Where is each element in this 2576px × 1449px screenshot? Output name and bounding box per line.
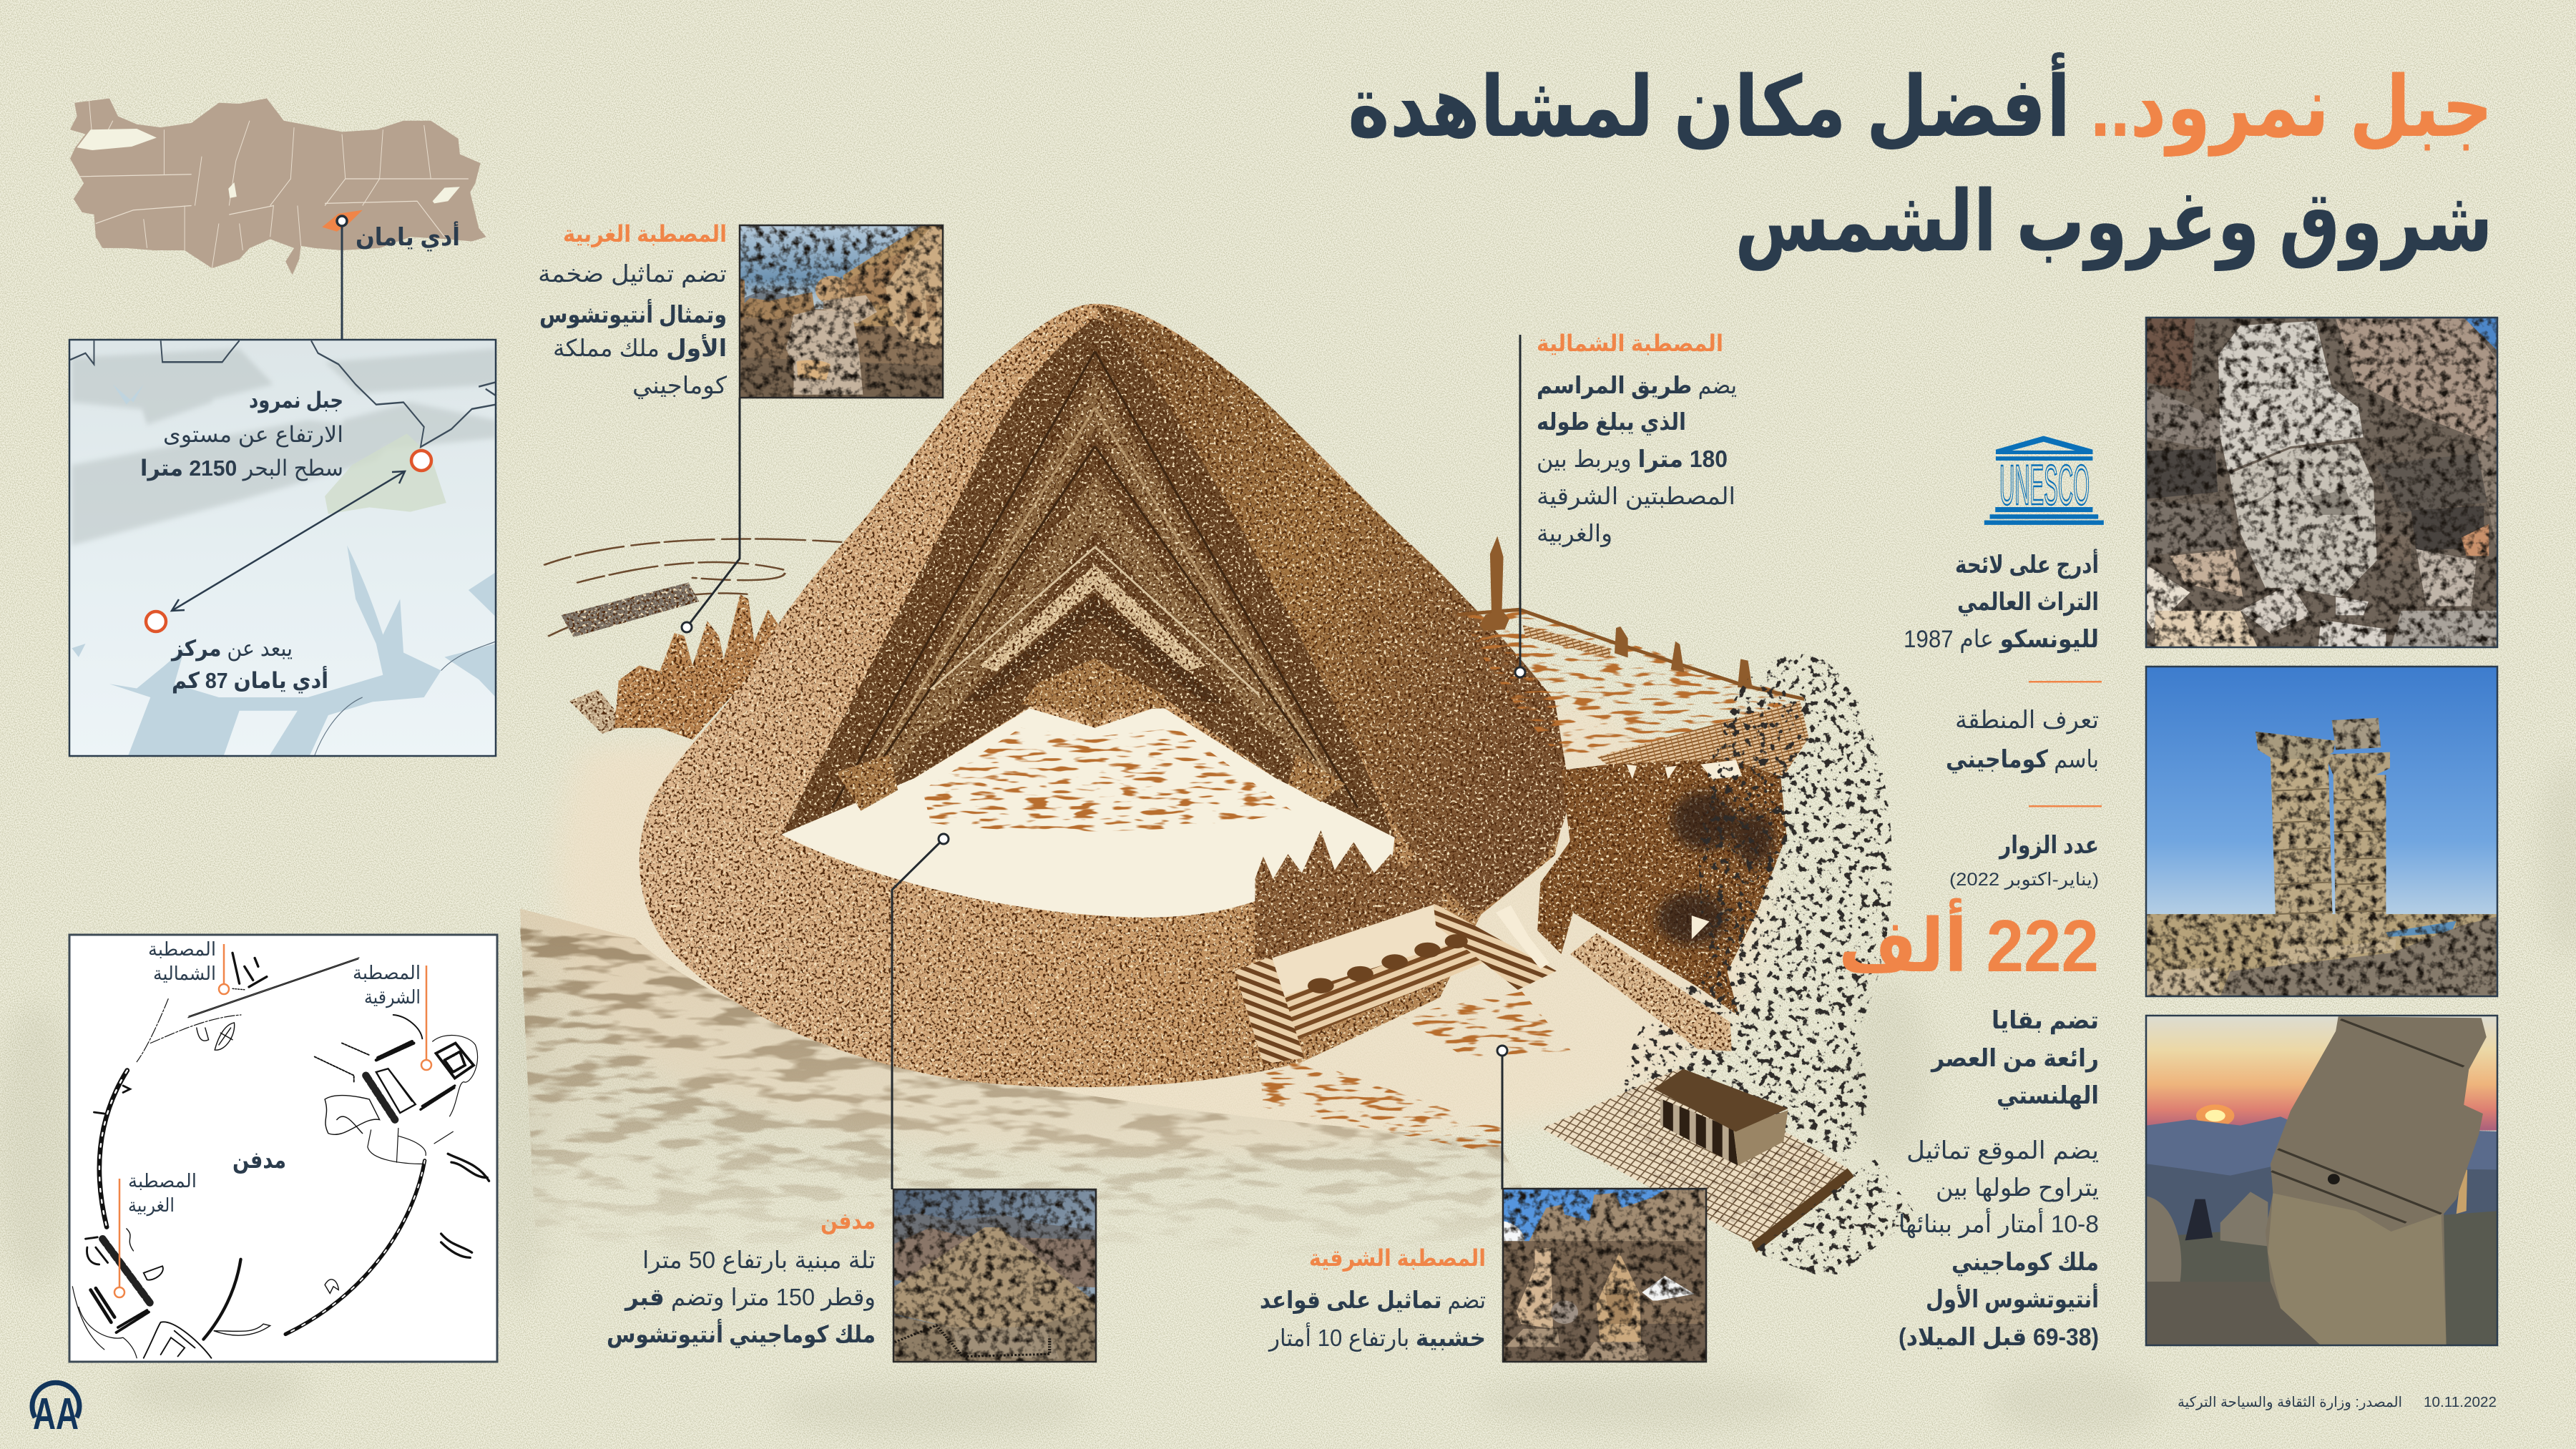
east terrace text: المصطبة الشرقية bbox=[1309, 1245, 1486, 1272]
title bbox=[1348, 51, 2493, 271]
lakes bbox=[228, 182, 460, 203]
east terrace platform with stairs bbox=[1235, 903, 1557, 1064]
photo: colossal head among rocks bbox=[2146, 318, 2498, 648]
north terrace text: 180 مترا ويربط بين bbox=[1537, 446, 1728, 473]
icon: UNESCO temple logo bbox=[1984, 436, 2104, 525]
inset text: distance: أدي يامان 87 كم bbox=[172, 666, 328, 694]
arrow between mountain and city bbox=[172, 471, 405, 611]
east terrace text: خشبية بارتفاع 10 أمتار bbox=[1268, 1322, 1486, 1352]
west terrace text: تضم تماثيل ضخمة bbox=[538, 260, 727, 288]
north terrace text: والغربية bbox=[1537, 520, 1612, 547]
inset text: distance: يبعد عن مركز bbox=[170, 636, 293, 662]
north terrace text: المصطبة الشمالية bbox=[1537, 330, 1723, 356]
chevron ribs bbox=[832, 351, 1358, 808]
photo: tomb mound bbox=[893, 1189, 1096, 1362]
right column: UNESCO listing: لليونسكو عام 1987 bbox=[1904, 626, 2099, 654]
west terrace text: المصطبة الغربية bbox=[563, 221, 727, 247]
tomb text: وقطر 150 مترا وتضم قبر bbox=[624, 1284, 876, 1312]
right column: statues description: 10-8 أمتار أمر ببنائها bbox=[1899, 1208, 2099, 1239]
logo: Anadolu Agency bbox=[32, 1382, 79, 1439]
footer source and date: 10.11.2022 bbox=[2424, 1395, 2497, 1410]
column drum joints bbox=[2272, 789, 2386, 914]
crumbling grey scatter bbox=[1624, 651, 1892, 1223]
right column: UNESCO listing bbox=[1904, 549, 2099, 654]
plan label: west terrace: الغربية bbox=[128, 1194, 175, 1217]
plan label: west terrace: المصطبة bbox=[128, 1170, 197, 1192]
plan label: north terrace: المصطبة bbox=[148, 938, 216, 960]
plan label: north terrace bbox=[148, 938, 229, 994]
right column: Hellenistic remains bbox=[1930, 1007, 2099, 1110]
right column: statues description: (69-38 قبل الميلاد) bbox=[1899, 1324, 2099, 1351]
pale inner floor bbox=[781, 706, 1395, 918]
plan label: north terrace: الشمالية bbox=[153, 963, 216, 984]
plan label: east terrace: المصطبة bbox=[353, 962, 421, 983]
photo: head at sunset bbox=[2146, 1016, 2498, 1345]
north terrace text: المصطبتين الشرقية bbox=[1537, 483, 1735, 510]
plan label: west terrace bbox=[114, 1170, 197, 1297]
tomb text: ملك كوماجيني أنتيوتشوس bbox=[607, 1319, 876, 1349]
callout leader lines bbox=[682, 335, 1525, 1189]
right column: visitors stat bbox=[1838, 832, 2099, 987]
right column: visitors stat: (يناير-اكتوبر 2022) bbox=[1949, 870, 2099, 890]
inset text: elevation: جبل نمرود bbox=[249, 388, 343, 413]
plan label: tomb: مدفن bbox=[232, 1146, 286, 1174]
divider bbox=[2029, 681, 2102, 682]
west terrace text: كوماجيني bbox=[632, 372, 727, 399]
right column: Hellenistic remains: الهلنستي bbox=[1997, 1082, 2099, 1110]
dark rocky slope bbox=[1537, 758, 1786, 1016]
Turkey outline bbox=[70, 99, 486, 275]
right column: Commagene name: تعرف المنطقة bbox=[1955, 707, 2099, 735]
mountain shading bbox=[72, 349, 496, 545]
inset text: elevation: الارتفاع عن مستوى bbox=[163, 422, 343, 448]
east terrace text bbox=[1260, 1245, 1486, 1352]
inner chamber relief bbox=[836, 659, 1346, 811]
east terrace text: تضم تماثيل على قواعد bbox=[1260, 1287, 1486, 1315]
rock shadow bbox=[1656, 791, 1775, 945]
inset text: distance bbox=[170, 636, 328, 694]
Marmara sea bbox=[77, 129, 157, 150]
tomb text bbox=[607, 1208, 876, 1349]
north terrace retaining wall and statues bbox=[1457, 536, 1804, 699]
east terrace statues bbox=[1255, 830, 1443, 961]
plan label: east terrace bbox=[353, 962, 431, 1070]
right column: UNESCO listing: التراث العالمي bbox=[1957, 589, 2099, 617]
photo: east terrace bbox=[1503, 1189, 1706, 1362]
right column: statues description: يضم الموقع تماثيل bbox=[1906, 1137, 2099, 1165]
west terrace text: وتمثال أنتيوتشوس bbox=[539, 299, 727, 329]
tomb text: مدفن bbox=[821, 1208, 876, 1234]
rock highlights bbox=[1496, 760, 1742, 969]
photo: west terrace bbox=[740, 225, 943, 398]
Adiyaman dot bbox=[337, 216, 347, 226]
north terrace text: يضم طريق المراسم bbox=[1537, 372, 1737, 400]
central chevron cutaway bbox=[781, 319, 1395, 838]
right column: statues description: ملك كوماجيني bbox=[1951, 1249, 2099, 1277]
ground halo around mound bbox=[556, 701, 1768, 1153]
panel: terrain inset map bbox=[69, 340, 496, 760]
lower west wall bbox=[1259, 992, 1571, 1154]
panel: site plan bbox=[69, 935, 497, 1362]
divider bbox=[2029, 805, 2102, 807]
Adiyaman province bbox=[322, 210, 363, 232]
right dark facet bbox=[1095, 306, 1569, 915]
mound body bbox=[640, 304, 1569, 1087]
north terrace plaza bbox=[1460, 609, 1804, 770]
right column: Hellenistic remains: تضم بقايا bbox=[1992, 1007, 2099, 1035]
inset text: elevation bbox=[140, 388, 343, 481]
north terrace brick wall bbox=[1597, 701, 1808, 776]
Adiyaman label: أدي يامان bbox=[356, 221, 460, 251]
right column: Commagene name: باسم كوماجيني bbox=[1946, 746, 2099, 774]
mountain park zone bbox=[325, 433, 446, 514]
right column: Hellenistic remains: رائعة من العصر bbox=[1930, 1045, 2099, 1073]
left terrace lines and relief bbox=[544, 539, 844, 740]
connector line to inset bbox=[341, 221, 343, 340]
logo: Anadolu Agency: AA bbox=[33, 1390, 79, 1439]
illustration: Mount Nemrut tumulus cutaway bbox=[520, 304, 1917, 1294]
north terrace text: الذي يبلغ طوله bbox=[1537, 408, 1686, 436]
province borders bbox=[70, 340, 496, 447]
plan drawing bbox=[72, 953, 489, 1358]
photo: columns against blue sky bbox=[2146, 667, 2498, 996]
province borders bbox=[79, 99, 469, 268]
decorated wall east of terrace bbox=[1570, 933, 1732, 1051]
lower rocky slope fading out bbox=[520, 908, 1547, 1294]
west terrace text: الأول ملك مملكة bbox=[553, 333, 727, 363]
right column: Commagene name bbox=[1946, 707, 2099, 774]
marker: Adiyaman bbox=[146, 611, 166, 632]
temple surrounding hatching bbox=[1753, 1159, 1917, 1280]
right column: UNESCO listing: أدرج على لائحة bbox=[1955, 549, 2099, 579]
footer source and date: المصدر: وزارة الثقافة والسياحة التركية bbox=[2178, 1395, 2402, 1410]
Turkey locator map bbox=[70, 99, 486, 340]
right column: visitors stat: 222 ألف bbox=[1838, 898, 2099, 987]
north terrace text bbox=[1537, 330, 1737, 547]
inset text: elevation: سطح البحر 2150 مترا bbox=[140, 456, 343, 481]
right column: statues description: أنتيوتشوس الأول bbox=[1926, 1283, 2099, 1314]
infographic canvas: UNESCO bbox=[1999, 453, 2090, 516]
plan label: east terrace: الشرقية bbox=[364, 986, 421, 1008]
reservoirs bbox=[72, 385, 496, 760]
title: جبل نمرود.. أفضل مكان لمشاهدة bbox=[1348, 51, 2493, 157]
west terrace text bbox=[538, 221, 727, 399]
tomb text: تلة مبنية بارتفاع 50 مترا bbox=[642, 1247, 876, 1274]
right column: statues description: يتراوح طولها بين bbox=[1936, 1174, 2099, 1202]
temple platform bbox=[1542, 1069, 1854, 1252]
right column: statues description bbox=[1899, 1137, 2099, 1351]
right column: visitors stat: عدد الزوار bbox=[1998, 832, 2099, 860]
marker: Mount Nemrut bbox=[411, 451, 431, 471]
floor dash marks bbox=[923, 728, 1292, 831]
